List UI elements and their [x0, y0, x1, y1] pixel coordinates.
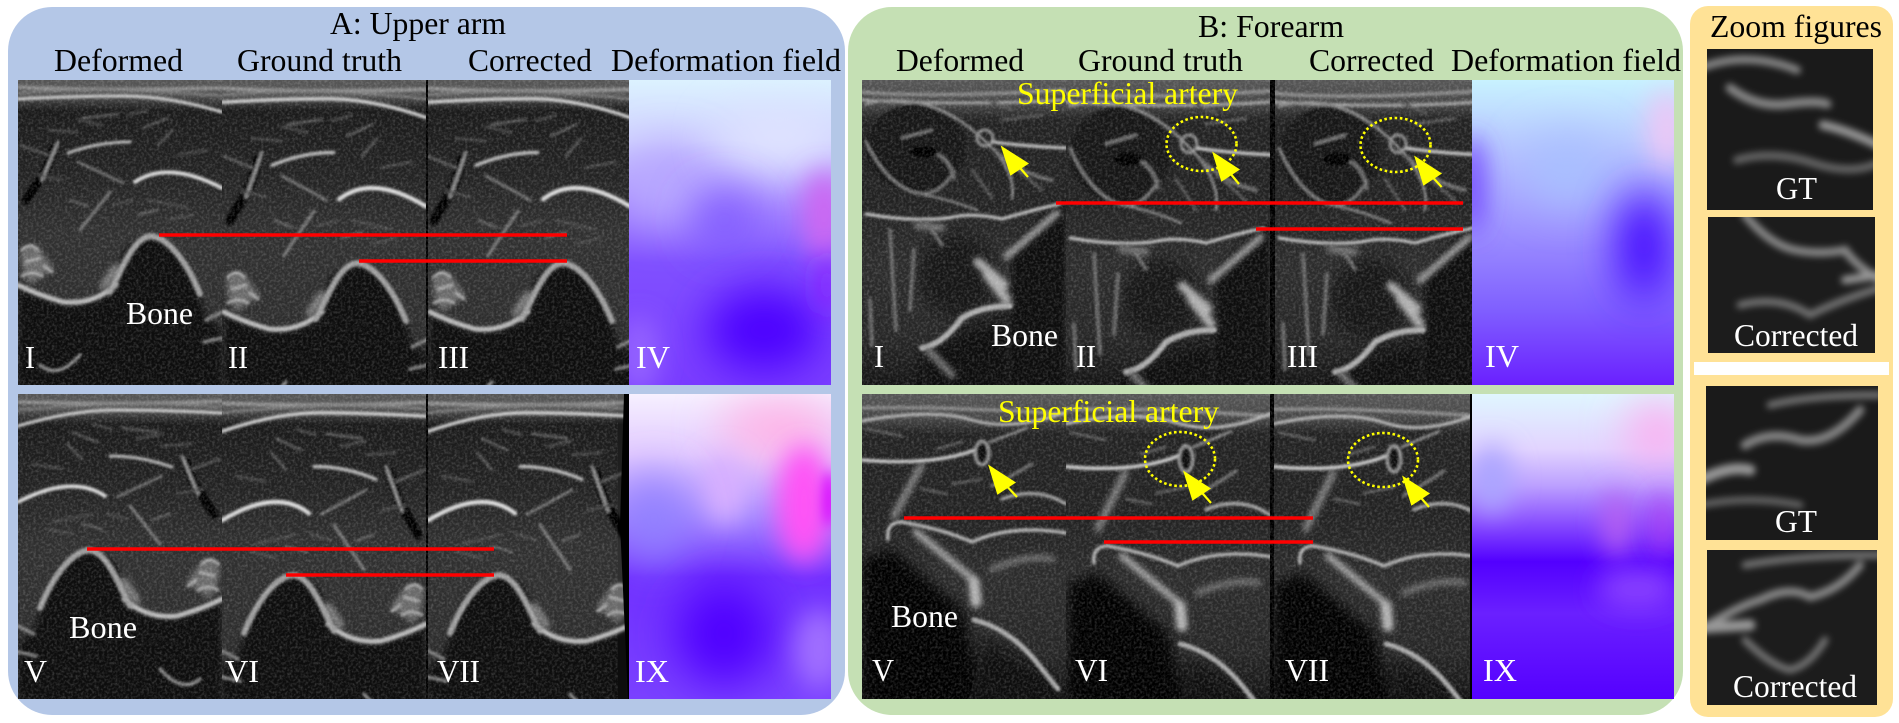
ultrasound: A row 2 deformed — [18, 394, 222, 723]
labels: A row 2: Bone — [69, 609, 137, 645]
column heading: Deformation field: Deformation field — [1451, 42, 1681, 78]
labels: A row 1: III — [438, 339, 469, 375]
separator — [1694, 362, 1889, 375]
labels: B row 2: VI — [1075, 652, 1108, 688]
ultrasound: B row 2 deformed — [862, 394, 1066, 723]
ultrasound: A row 1 deformed — [18, 80, 222, 410]
panel heading: zoom figures: Zoom figures — [1710, 8, 1882, 44]
labels: A row 1: I — [25, 339, 35, 375]
labels: B row 1 — [874, 317, 1519, 374]
column heading: Corrected: Corrected — [1309, 42, 1434, 78]
labels: B row 1: II — [1076, 338, 1096, 374]
dotted circles: superficial artery row 2 — [1145, 432, 1418, 487]
labels: A row 2 — [24, 609, 669, 689]
column heading: Deformation field: Deformation field — [611, 42, 841, 78]
zoom crop: corrected top — [1708, 215, 1880, 353]
labels: B row 2: VII — [1285, 652, 1329, 688]
labels: B row 1: IV — [1485, 338, 1519, 374]
red reference lines: A row 2 — [87, 549, 494, 575]
ultrasound: B row 2 ground truth — [1066, 394, 1272, 723]
labels: A row 2: V — [24, 653, 47, 689]
red reference lines: A row 1 — [159, 235, 567, 261]
annotation: superficial artery row 1: Superficial artery — [1017, 75, 1238, 111]
labels: B row 1: I — [874, 338, 884, 374]
panel heading: A upper arm: A: Upper arm — [330, 5, 506, 41]
zoom label: GT bottom: GT — [1775, 503, 1817, 539]
panel: A upper arm — [8, 5, 846, 723]
ultrasound: A row 2 ground truth — [222, 394, 426, 723]
dotted circles: superficial artery row 1 — [1166, 117, 1430, 172]
arrows: yellow row 2 — [990, 467, 1429, 507]
deformation field: B IV — [1472, 80, 1674, 385]
labels: B row 2: IX — [1483, 652, 1517, 688]
labels: A row 1: IV — [636, 339, 670, 375]
labels: B row 2: Bone — [891, 598, 958, 634]
zoom crop: GT top — [1700, 49, 1880, 210]
labels: A row 1 — [25, 295, 670, 375]
zoom label: GT top: GT — [1776, 170, 1817, 206]
ultrasound: A row 1 corrected — [426, 80, 629, 385]
labels: B row 2 — [872, 598, 1517, 688]
labels: B row 1: III — [1287, 338, 1318, 374]
ultrasound: B row 2 corrected — [1270, 394, 1478, 723]
labels: B row 1: Bone — [991, 317, 1058, 353]
ultrasound: A row 2 corrected — [426, 394, 632, 723]
panel heading: B forearm: B: Forearm — [1198, 8, 1344, 44]
red reference lines: B row 2 — [904, 518, 1313, 542]
column heading: Ground truth: Ground truth — [237, 42, 402, 78]
labels: A row 1: II — [228, 339, 248, 375]
zoom label: corrected bottom: Corrected — [1733, 668, 1857, 704]
deformation field: A IV — [629, 80, 831, 385]
labels: A row 1: Bone — [126, 295, 193, 331]
zoom crop: GT bottom — [1700, 386, 1880, 540]
ultrasound: A row 1 ground truth — [222, 80, 426, 385]
ultrasound: B row 1 corrected — [1270, 80, 1472, 385]
column heading: Deformed: Deformed — [896, 42, 1024, 78]
annotation: superficial artery row 2: Superficial artery — [998, 393, 1219, 429]
deformation field: A IX — [624, 394, 844, 699]
labels: A row 2: IX — [635, 653, 669, 689]
ultrasound: B row 1 deformed — [862, 80, 1066, 410]
arrows: yellow row 1 — [1003, 148, 1442, 187]
zoom label: corrected top: Corrected — [1734, 317, 1858, 353]
column heading: Deformed: Deformed — [54, 42, 183, 78]
red reference lines: B row 1 — [1056, 203, 1463, 229]
deformation field: B IX — [1472, 394, 1687, 699]
panel: B forearm — [848, 7, 1687, 723]
column heading: Ground truth: Ground truth — [1078, 42, 1243, 78]
ultrasound: B row 1 ground truth — [1066, 80, 1270, 385]
labels: B row 2: V — [872, 652, 894, 688]
labels: A row 2: VII — [437, 653, 480, 689]
labels: A row 2: VI — [225, 653, 259, 689]
panel: zoom figures — [1690, 6, 1893, 717]
zoom crop: corrected bottom — [1700, 550, 1880, 705]
column heading: Corrected: Corrected — [468, 42, 592, 78]
